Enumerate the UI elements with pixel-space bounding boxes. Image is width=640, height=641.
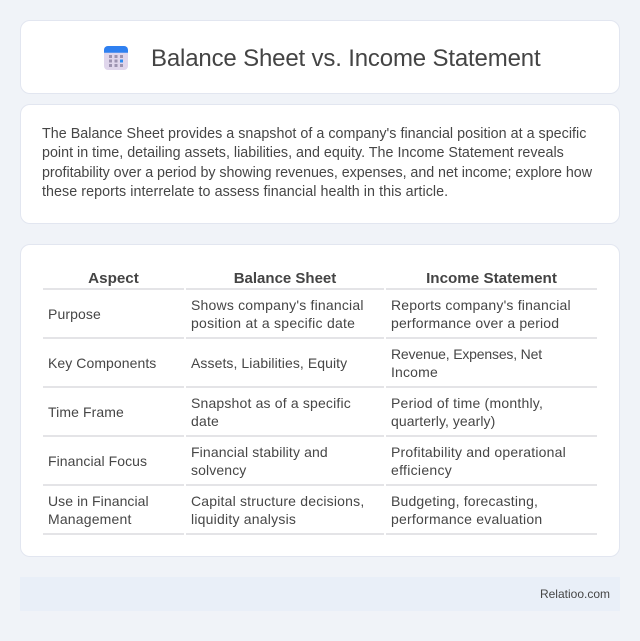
comparison table: Management: [48, 511, 132, 527]
comparison table: performance evaluation: [391, 511, 542, 527]
intro text: point in time, detailing assets, liabilities, and equity. The Income Statement reveals: [42, 145, 564, 161]
comparison table: quarterly, yearly): [391, 413, 495, 429]
footer credit: Relatioo.com: [540, 587, 610, 601]
comparison table: Assets, Liabilities, Equity: [191, 355, 347, 371]
icon: calendar: [104, 46, 128, 70]
panel: title card: [20, 20, 620, 94]
intro text: The Balance Sheet provides a snapshot of a company's financial position at a specific: [42, 126, 586, 142]
comparison table: [43, 270, 597, 535]
title: Balance Sheet vs. Income Statement: [151, 45, 540, 72]
comparison table: Use in Financial: [48, 493, 149, 509]
comparison table: position at a specific date: [191, 315, 355, 331]
intro text: these reports interrelate to assess financial health in this article.: [42, 184, 448, 200]
comparison table: Revenue, Expenses, Net: [391, 346, 542, 362]
comparison table: solvency: [191, 462, 246, 478]
comparison table: efficiency: [391, 462, 452, 478]
panel: comparison table: [20, 244, 620, 557]
comparison table: Purpose: [48, 306, 101, 322]
comparison table: Financial Focus: [48, 453, 147, 469]
comparison table: liquidity analysis: [191, 511, 296, 527]
comparison table: performance over a period: [391, 315, 559, 331]
comparison table: Time Frame: [48, 404, 124, 420]
comparison table: Balance Sheet: [234, 270, 336, 286]
comparison table: Income: [391, 364, 438, 380]
footer: [20, 577, 620, 611]
comparison table: Period of time (monthly,: [391, 395, 543, 411]
comparison table: Income Statement: [426, 270, 557, 286]
comparison table: Profitability and operational: [391, 444, 566, 460]
comparison table: Reports company's financial: [391, 297, 571, 313]
intro text: profitability over a period by showing revenues, expenses, and net income; explore how: [42, 165, 592, 181]
panel: intro: [20, 104, 620, 224]
comparison table: Snapshot as of a specific: [191, 395, 351, 411]
comparison table: Budgeting, forecasting,: [391, 493, 538, 509]
comparison table: Financial stability and: [191, 444, 328, 460]
comparison table: Shows company's financial: [191, 297, 364, 313]
comparison table: Aspect: [88, 270, 139, 286]
comparison table: Capital structure decisions,: [191, 493, 364, 509]
comparison table: date: [191, 413, 219, 429]
comparison table: Key Components: [48, 355, 156, 371]
intro text: [42, 126, 592, 200]
